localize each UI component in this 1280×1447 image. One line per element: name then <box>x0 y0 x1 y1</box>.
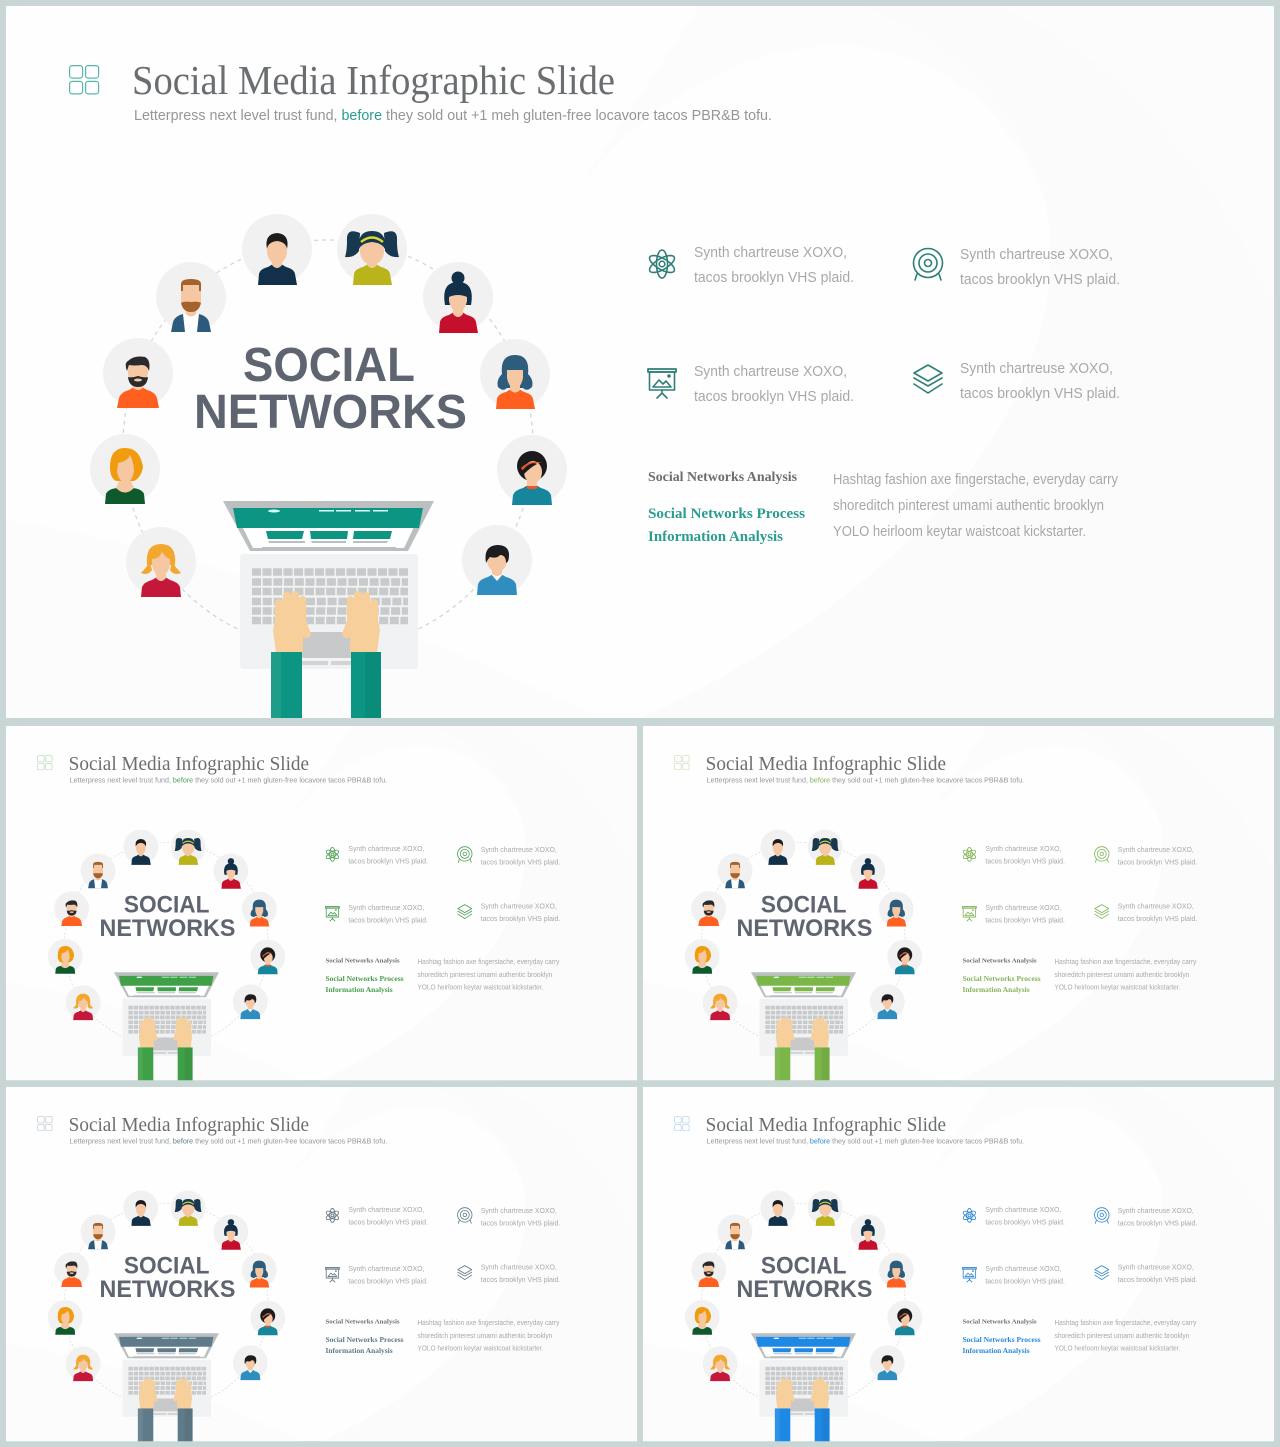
paragraph <box>1055 1318 1197 1353</box>
central heading: SOCIAL <box>761 1253 847 1280</box>
feature text: top left: Synth chartreuse XOXO, <box>694 245 847 261</box>
paragraph: YOLO heirloom keytar waistcoat kickstarter. <box>1055 1344 1180 1353</box>
sleeves <box>271 652 302 718</box>
central heading <box>737 1253 872 1303</box>
central heading: NETWORKS <box>100 1276 235 1303</box>
central heading <box>194 339 467 439</box>
feature text: top left: tacos brooklyn VHS plaid. <box>694 270 854 286</box>
analysis headings: Information Analysis <box>325 1346 393 1355</box>
paragraph <box>418 957 560 992</box>
central heading: SOCIAL <box>124 1253 210 1280</box>
paragraph: Hashtag fashion axe fingerstache, everyday carry <box>1055 957 1197 966</box>
central heading: SOCIAL <box>761 892 847 919</box>
avatar: woman with bun <box>423 262 493 333</box>
information heading: Information Analysis <box>648 529 783 545</box>
feature texts: Synth chartreuse XOXO, <box>481 845 557 854</box>
panel: blue slide <box>643 1087 1274 1441</box>
feature text: lower left: Synth chartreuse XOXO, <box>694 364 847 380</box>
paragraph <box>1055 957 1197 992</box>
analysis headings: Social Networks Process <box>325 1335 404 1344</box>
feature icons <box>647 248 942 398</box>
right hand <box>342 591 380 653</box>
paragraph: YOLO heirloom keytar waistcoat kickstarter. <box>833 524 1086 540</box>
subtitle: Letterpress next level trust fund, before they sold out +1 meh gluten-free locavore tacos PBR&B tofu. <box>70 1137 387 1146</box>
feature texts: tacos brooklyn VHS plaid. <box>348 916 428 925</box>
feature texts: tacos brooklyn VHS plaid. <box>985 1217 1065 1226</box>
feature texts: Synth chartreuse XOXO, <box>985 1264 1061 1273</box>
subtitle: Letterpress next level trust fund, before they sold out +1 meh gluten-free locavore tacos PBR&B tofu. <box>707 776 1024 785</box>
paragraph <box>418 1318 560 1353</box>
feature text: lower right: Synth chartreuse XOXO, <box>960 361 1113 377</box>
feature text: top right: tacos brooklyn VHS plaid. <box>960 272 1120 288</box>
title: Social Media Infographic Slide <box>706 1114 946 1136</box>
paragraph: shoreditch pinterest umami authentic brooklyn <box>1055 1331 1189 1340</box>
analysis headings <box>325 1318 404 1355</box>
analysis headings: Social Networks Analysis <box>962 957 1037 964</box>
feature texts: tacos brooklyn VHS plaid. <box>1118 914 1197 923</box>
panel: slate slide <box>6 1087 637 1441</box>
paragraph: Hashtag fashion axe fingerstache, everyday carry <box>833 472 1119 488</box>
icon: grid <box>70 66 99 94</box>
feature texts <box>985 1205 1197 1286</box>
keyboard <box>252 572 408 620</box>
analysis heading: Social Networks Analysis <box>648 469 797 484</box>
central heading: NETWORKS <box>737 915 872 942</box>
panel: green slide <box>6 726 637 1080</box>
feature texts: tacos brooklyn VHS plaid. <box>1118 1275 1197 1284</box>
avatar: boy in blue shirt <box>462 525 532 595</box>
process heading: Social Networks Process <box>648 506 805 522</box>
feature texts: Synth chartreuse XOXO, <box>1118 902 1194 911</box>
analysis headings: Information Analysis <box>962 985 1030 994</box>
central heading <box>100 1253 235 1303</box>
paragraph <box>833 472 1119 540</box>
icon: layers <box>914 365 942 393</box>
feature texts: tacos brooklyn VHS plaid. <box>985 916 1065 925</box>
avatar: man in navy shirt <box>242 214 312 285</box>
analysis headings <box>962 1318 1041 1355</box>
panel: light green slide <box>643 726 1274 1080</box>
feature texts <box>985 844 1197 925</box>
feature texts: tacos brooklyn VHS plaid. <box>348 1217 428 1226</box>
feature texts: Synth chartreuse XOXO, <box>985 903 1061 912</box>
icon: presentation <box>648 369 676 398</box>
feature texts: tacos brooklyn VHS plaid. <box>1118 857 1197 866</box>
avatar: girl with blonde pigtails <box>126 527 196 597</box>
avatar: man with brown beard <box>156 262 226 332</box>
analysis headings: Social Networks Process <box>962 974 1041 983</box>
feature texts <box>348 1205 560 1286</box>
feature text: top right: Synth chartreuse XOXO, <box>960 247 1113 263</box>
avatar: woman with blue hair <box>480 339 550 409</box>
laptop lid <box>223 501 434 551</box>
analysis headings: Social Networks Analysis <box>325 957 400 964</box>
paragraph: shoreditch pinterest umami authentic brooklyn <box>418 1331 552 1340</box>
central heading: NETWORKS <box>194 386 467 439</box>
paragraph: YOLO heirloom keytar waistcoat kickstarter. <box>1055 983 1180 992</box>
analysis headings <box>325 957 404 994</box>
feature texts <box>348 844 560 925</box>
laptop with hands <box>223 501 434 718</box>
paragraph: Hashtag fashion axe fingerstache, everyday carry <box>418 957 560 966</box>
analysis headings: Social Networks Process <box>325 974 404 983</box>
paragraph: YOLO heirloom keytar waistcoat kickstarter. <box>418 1344 543 1353</box>
feature texts: Synth chartreuse XOXO, <box>1118 1206 1194 1215</box>
paragraph: Hashtag fashion axe fingerstache, everyday carry <box>418 1318 560 1327</box>
feature texts: tacos brooklyn VHS plaid. <box>481 1218 560 1227</box>
central heading <box>737 892 872 942</box>
analysis headings: Social Networks Analysis <box>962 1318 1037 1325</box>
subtitle: Letterpress next level trust fund, before they sold out +1 meh gluten-free locavore tacos PBR&B tofu. <box>70 776 387 785</box>
feature text: lower right <box>960 361 1120 402</box>
analysis headings: Social Networks Process <box>962 1335 1041 1344</box>
feature texts: tacos brooklyn VHS plaid. <box>985 856 1065 865</box>
feature text: top right <box>960 247 1120 288</box>
avatar: girl with pigtails <box>337 214 407 285</box>
feature texts: tacos brooklyn VHS plaid. <box>481 857 560 866</box>
title: Social Media Infographic Slide <box>69 753 309 775</box>
title: Social Media Infographic Slide <box>132 57 615 103</box>
avatar: woman with orange hair <box>90 434 160 504</box>
feature texts: tacos brooklyn VHS plaid. <box>481 914 560 923</box>
feature text: top left <box>694 245 854 286</box>
feature text: lower left <box>694 364 854 405</box>
feature texts: Synth chartreuse XOXO, <box>348 1264 424 1273</box>
feature texts: tacos brooklyn VHS plaid. <box>348 856 428 865</box>
analysis headings: Social Networks Analysis <box>325 1318 400 1325</box>
avatar: woman with headband <box>497 435 567 505</box>
subtitle: Letterpress next level trust fund, before they sold out +1 meh gluten-free locavore tacos PBR&B tofu. <box>707 1137 1024 1146</box>
central heading <box>100 892 235 942</box>
analysis headings: Information Analysis <box>325 985 393 994</box>
feature texts: tacos brooklyn VHS plaid. <box>348 1277 428 1286</box>
feature text: lower left: tacos brooklyn VHS plaid. <box>694 389 854 405</box>
title: Social Media Infographic Slide <box>706 753 946 775</box>
feature texts: tacos brooklyn VHS plaid. <box>985 1277 1065 1286</box>
central heading: NETWORKS <box>737 1276 872 1303</box>
paragraph: Hashtag fashion axe fingerstache, everyday carry <box>1055 1318 1197 1327</box>
trackpad <box>302 632 352 658</box>
feature texts: Synth chartreuse XOXO, <box>348 1205 424 1214</box>
central heading: SOCIAL <box>124 892 210 919</box>
paragraph: shoreditch pinterest umami authentic brooklyn <box>833 498 1104 514</box>
feature texts: Synth chartreuse XOXO, <box>1118 845 1194 854</box>
analysis headings: Information Analysis <box>962 1346 1030 1355</box>
paragraph: shoreditch pinterest umami authentic brooklyn <box>1055 970 1189 979</box>
panel: main teal slide <box>6 6 1274 718</box>
icon: atom <box>647 250 677 278</box>
analysis headings <box>962 957 1041 994</box>
feature texts: tacos brooklyn VHS plaid. <box>1118 1218 1197 1227</box>
feature texts: Synth chartreuse XOXO, <box>985 1205 1061 1214</box>
icon: target <box>914 248 942 280</box>
paragraph: shoreditch pinterest umami authentic brooklyn <box>418 970 552 979</box>
left hand <box>273 591 311 653</box>
feature texts: Synth chartreuse XOXO, <box>481 1206 557 1215</box>
central heading: SOCIAL <box>243 339 415 392</box>
feature texts: Synth chartreuse XOXO, <box>985 844 1061 853</box>
feature texts: Synth chartreuse XOXO, <box>348 903 424 912</box>
feature texts: tacos brooklyn VHS plaid. <box>481 1275 560 1284</box>
feature texts: Synth chartreuse XOXO, <box>1118 1263 1194 1272</box>
feature text: lower right: tacos brooklyn VHS plaid. <box>960 386 1120 402</box>
feature texts: Synth chartreuse XOXO, <box>481 902 557 911</box>
paragraph: YOLO heirloom keytar waistcoat kickstarter. <box>418 983 543 992</box>
avatars ring <box>90 214 567 650</box>
laptop base <box>240 554 418 669</box>
slide background <box>6 6 1274 718</box>
feature texts: Synth chartreuse XOXO, <box>481 1263 557 1272</box>
central heading: NETWORKS <box>100 915 235 942</box>
subtitle: Letterpress next level trust fund, before they sold out +1 meh gluten-free locavore tacos PBR&B tofu. <box>134 108 772 124</box>
feature texts: Synth chartreuse XOXO, <box>348 844 424 853</box>
avatar: man with dark beard <box>103 338 173 408</box>
title: Social Media Infographic Slide <box>69 1114 309 1136</box>
